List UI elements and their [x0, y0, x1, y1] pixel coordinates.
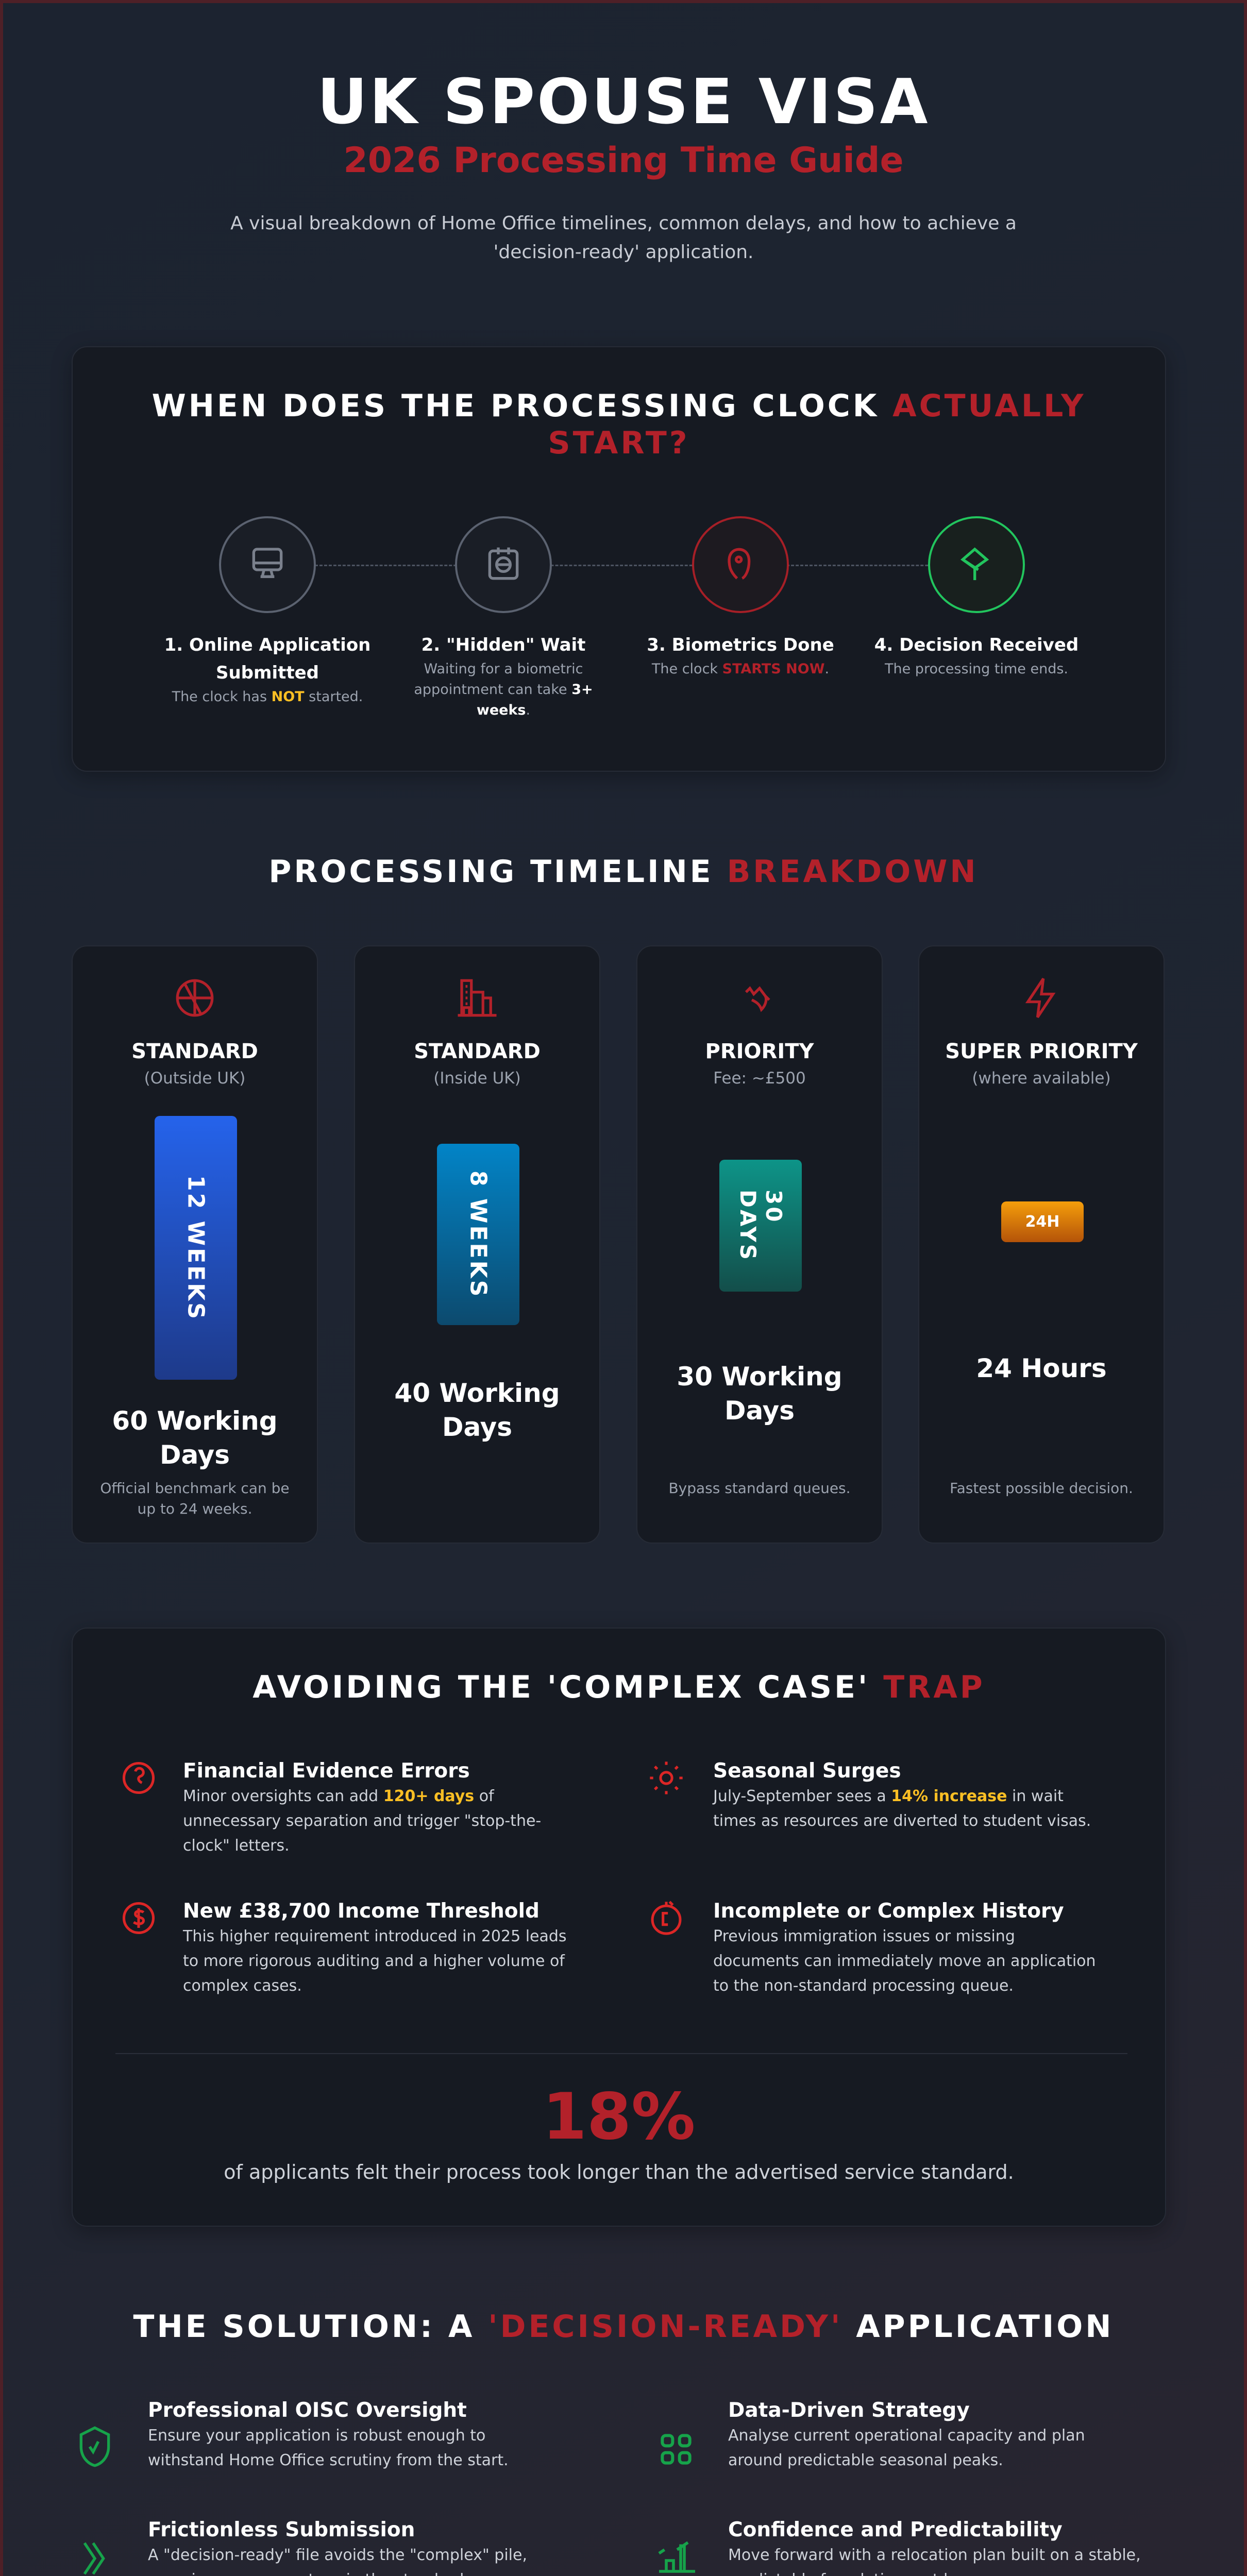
subtitle: 2026 Processing Time Guide [343, 140, 904, 181]
card: standard inside UK: STANDARD [414, 1040, 541, 1063]
icon: chevrons [74, 2538, 115, 2576]
heading: complex case: AVOIDING THE 'COMPLEX CASE' TRAP [252, 1669, 985, 1705]
card: standard inside UK: (Inside UK) [433, 1069, 521, 1088]
bar: 12 weeks [155, 1116, 237, 1380]
intro text [230, 213, 1017, 263]
text: Confidence and Predictability [728, 2518, 1063, 2541]
card: standard inside UK: 40 Working [394, 1378, 560, 1408]
item: seasonal surges [650, 1759, 1091, 1830]
bar: 24H: 24H [1025, 1213, 1059, 1231]
step 2 label: appointment can take 3+ [414, 682, 593, 698]
step 2 label: 2. "Hidden" Wait [422, 635, 585, 655]
step 1 label: 1. Online Application [164, 635, 370, 655]
text: Ensure your application is robust enough to [148, 2427, 485, 2445]
card: priority: PRIORITY [705, 1040, 814, 1063]
panel: complex case trap: to the non-standard processing queue. [713, 1977, 1014, 1995]
heading: solution: THE SOLUTION: A 'DECISION-READY' APPLICATION [133, 2309, 1114, 2345]
text: Data-Driven Strategy [728, 2399, 970, 2422]
item: frictionless [74, 2517, 641, 2518]
card: standard inside UK: Days [442, 1412, 512, 1442]
bar: 24H [1001, 1201, 1084, 1242]
icon: building [458, 979, 497, 1017]
icon: coin [123, 1762, 155, 1794]
stat caption: of applicants felt their process took longer than the advertised service standard. [224, 2161, 1014, 2183]
step 2 label [414, 635, 593, 718]
step 1 label: Submitted [216, 663, 319, 683]
icon: lightning [1025, 978, 1055, 1018]
icon: growth [655, 2532, 699, 2575]
step 2 label: weeks. [477, 702, 530, 718]
text: Professional OISC Oversight [148, 2399, 467, 2422]
card: priority [636, 945, 883, 1544]
panel: complex case trap: Financial Evidence Errors [183, 1759, 470, 1783]
item: data strategy [661, 2399, 1085, 2469]
panel: complex case trap: unnecessary separation and trigger "stop-the- [183, 1812, 541, 1830]
heading: clock start: START? [548, 425, 690, 461]
text: withstand Home Office scrutiny from the start. [148, 2451, 509, 2469]
card: priority: Days [724, 1396, 795, 1426]
bar: 30 days: DAYS [735, 1190, 761, 1262]
card: super priority: 24 Hours [976, 1353, 1107, 1383]
icon: bird [745, 986, 770, 1012]
step 1 icon [219, 516, 316, 613]
heading: clock start [152, 388, 1086, 461]
card: standard outside UK: Official benchmark can be [100, 1480, 290, 1497]
intro text: A visual breakdown of Home Office timelines, common delays, and how to achieve a [230, 213, 1017, 234]
bar: 30 days: 30 [761, 1190, 786, 1224]
bar: 30 days [719, 1160, 802, 1292]
text: around predictable seasonal peaks. [728, 2451, 1003, 2469]
text: A "decision-ready" file avoids the "complex" pile, [148, 2546, 527, 2564]
icon: dollar [123, 1902, 155, 1934]
panel: when does the clock start [72, 346, 1166, 772]
heading: clock start: WHEN DOES THE PROCESSING CLOCK ACTUALLY [152, 388, 1086, 424]
panel: complex case trap: times as resources are diverted to student visas. [713, 1812, 1091, 1830]
dashed connector [315, 565, 974, 566]
card: super priority: SUPER PRIORITY [945, 1040, 1138, 1063]
item: complex history [651, 1900, 1096, 1995]
panel: complex case trap: to more rigorous auditing and a higher volume of [183, 1952, 565, 1970]
step 1 label [164, 635, 370, 705]
step 2 label: Waiting for a biometric [424, 661, 583, 677]
panel: complex case trap: clock" letters. [183, 1837, 290, 1855]
step 1 label: The clock has NOT started. [172, 689, 363, 705]
stat: 18%: 18% [543, 2080, 695, 2154]
card: standard outside UK: up to 24 weeks. [137, 1500, 252, 1517]
text: Analyse current operational capacity and plan [728, 2427, 1085, 2445]
panel: complex case trap: New £38,700 Income Threshold [183, 1900, 540, 1923]
card: priority: Bypass standard queues. [668, 1480, 851, 1497]
bar: 8 weeks: 8 WEEKS [465, 1171, 492, 1298]
text: Frictionless Submission [148, 2518, 415, 2541]
panel: complex case trap: This higher requirement introduced in 2025 leads [183, 1927, 567, 1945]
card: super priority: (where available) [972, 1069, 1111, 1088]
intro text: 'decision-ready' application. [493, 242, 754, 263]
icon: timer [651, 1901, 681, 1935]
card: priority: 30 Working [677, 1362, 842, 1392]
card: standard outside UK [72, 945, 318, 1544]
panel: complex case trap: July-September sees a 14% increase in wait [713, 1787, 1064, 1805]
card: standard outside UK: STANDARD [131, 1040, 258, 1063]
panel: complex case trap: Seasonal Surges [713, 1759, 901, 1783]
panel: complex case trap [72, 1628, 1166, 2227]
panel: complex case trap: Previous immigration issues or missing [713, 1927, 1015, 1945]
bar: 8 weeks [437, 1144, 519, 1325]
card: standard outside UK: 60 Working [112, 1406, 278, 1436]
card: standard outside UK: Days [160, 1440, 230, 1470]
icon: grid [661, 2434, 692, 2465]
item: OISC oversight [79, 2399, 509, 2469]
text: Move forward with a relocation plan built on a stable, [728, 2546, 1141, 2564]
card: super priority [918, 945, 1165, 1544]
card: super priority: Fastest possible decision. [950, 1480, 1133, 1497]
title: UK SPOUSE VISA [317, 66, 930, 138]
icon: globe [176, 979, 213, 1017]
bar: 12 weeks: 12 WEEKS [182, 1175, 209, 1320]
step 3 label [647, 635, 834, 677]
panel: complex case trap: Incomplete or Complex History [713, 1900, 1064, 1923]
card: priority: Fee: ~£500 [713, 1069, 806, 1088]
step 3 label: 3. Biometrics Done [647, 635, 834, 655]
icon: sun [650, 1761, 683, 1794]
step 2 icon [455, 516, 552, 613]
step 4 label: The processing time ends. [885, 661, 1068, 677]
item: confidence [655, 2517, 1222, 2518]
icon: shield [79, 2427, 110, 2467]
heading: timeline breakdown: PROCESSING TIMELINE BREAKDOWN [268, 854, 979, 890]
step 4 icon [928, 516, 1025, 613]
step 3 label: The clock STARTS NOW. [652, 661, 829, 677]
step 4 label: 4. Decision Received [874, 635, 1079, 655]
panel: complex case trap: documents can immediately move an application [713, 1952, 1096, 1970]
panel: complex case trap: Minor oversights can add 120+ days of [183, 1787, 494, 1805]
card: standard outside UK: (Outside UK) [144, 1069, 245, 1088]
panel: complex case trap: complex cases. [183, 1977, 302, 1995]
step 4 label [874, 635, 1079, 677]
step 3 icon [692, 516, 789, 613]
card: standard inside UK [354, 945, 600, 1544]
item: financial evidence [123, 1759, 541, 1855]
item: income threshold [123, 1900, 567, 1995]
